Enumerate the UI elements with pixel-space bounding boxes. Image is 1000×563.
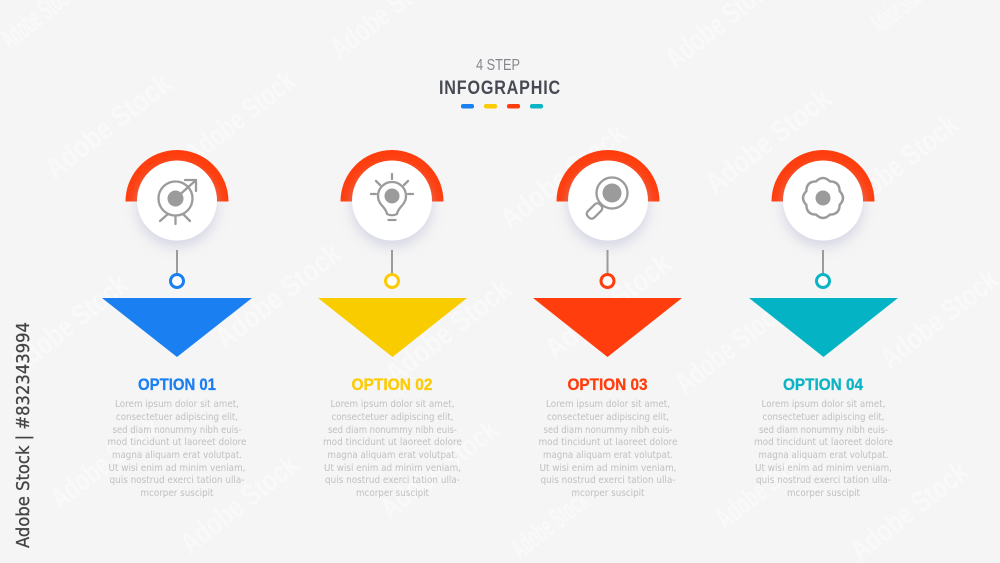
body text: quis nostrud exerci tation ulla- [110,475,245,486]
body text: Lorem ipsum dolor sit amet, [115,399,239,410]
red arc [340,150,444,202]
body text [538,399,678,499]
white circle [352,160,432,240]
body text: magna aliquam erat volutpat. [543,450,673,461]
ring marker [170,274,184,288]
white circle [783,160,863,240]
red triangle [533,298,682,357]
body text: quis nostrud exerci tation ulla- [325,475,460,486]
side credit: Adobe Stock id: Adobe Stock | #832343994 [14,322,34,548]
body text: sed diam nonummy nibh euis- [328,425,457,436]
body text: mcorper suscipit [787,488,860,499]
watermark pattern: Adobe Stock [709,442,816,536]
body text: consectetuer adipiscing elit, [762,412,884,423]
body text: sed diam nonummy nibh euis- [544,425,673,436]
body text: magna aliquam erat volutpat. [328,450,458,461]
body text: mcorper suscipit [572,488,645,499]
body text: mod tincidunt ut laoreet dolore [754,437,893,448]
body text: Lorem ipsum dolor sit amet, [762,399,886,410]
teal triangle [749,298,898,357]
white circle [137,160,217,240]
watermark pattern: Adobe Stock [539,247,678,366]
body text: quis nostrud exerci tation ulla- [756,475,891,486]
body text: Ut wisi enim ad minim veniam, [540,463,676,474]
body text: sed diam nonummy nibh euis- [112,425,242,436]
watermark pattern: Adobe Stock [494,117,633,236]
connector stem [391,250,393,274]
watermark pattern: Adobe Stock [39,67,178,186]
body text: Lorem ipsum dolor sit amet, [330,399,454,410]
heading: OPTION 01 [138,375,216,394]
body text: Ut wisi enim ad minim veniam, [324,463,461,474]
heading: OPTION 02 [352,375,432,394]
body text: mcorper suscipit [356,488,429,499]
panel: option 03 [533,150,682,499]
body text: mod tincidunt ut laoreet dolore [323,437,462,448]
body text: consectetuer adipiscing elit, [547,412,669,423]
watermark pattern: Adobe Stock [379,272,518,391]
heading: INFOGRAPHIC: INFOGRAPHIC [439,77,561,99]
red arc [126,150,228,202]
watermark pattern: Adobe Stock [4,268,135,381]
body text: magna aliquam erat volutpat. [758,450,888,461]
icon: magnifying glass [585,178,628,220]
body text: Ut wisi enim ad minim veniam, [108,463,246,474]
ring marker [601,274,614,288]
body text [754,399,893,499]
blue triangle [102,298,252,357]
body text: consectetuer adipiscing elit, [332,412,454,423]
connector stem [606,250,608,274]
watermark pattern: Adobe Stock [209,237,348,356]
body text: magna aliquam erat volutpat. [112,450,242,461]
title [439,57,561,99]
body text: consectetuer adipiscing elit, [116,412,238,423]
panel: option 01 [102,150,252,499]
subtitle: 4 STEP: 4 STEP [476,57,520,74]
heading: OPTION 03 [568,375,648,394]
icon: light bulb [371,174,413,220]
body text [108,399,246,499]
white circle [568,160,648,240]
red arc [556,150,660,202]
ring marker [386,274,398,288]
watermark pattern: Adobe Stock [834,108,965,221]
watermark pattern: Adobe Stock [174,448,305,561]
panel: option 02 [318,150,467,499]
ring marker [816,274,830,288]
watermark pattern: Adobe Stock [44,409,167,516]
body text: Lorem ipsum dolor sit amet, [546,399,670,410]
icon: target with arrow [158,180,196,224]
watermark pattern: Adobe Stock [504,484,595,563]
red arc [772,150,874,202]
body text: mod tincidunt ut laoreet dolore [538,437,678,448]
body text: mcorper suscipit [140,488,214,499]
yellow triangle [318,298,467,357]
watermark pattern: Adobe Stock [374,413,505,526]
connector stem [176,250,178,274]
connector stem [822,250,824,274]
body text: mod tincidunt ut laoreet dolore [108,437,246,448]
watermark pattern: Adobe Stock [669,294,792,401]
watermark pattern: Adobe Stock [179,64,302,171]
icon: gear badge [803,178,843,218]
title colour dashes [461,104,543,108]
body text: Ut wisi enim ad minim veniam, [755,463,892,474]
body text [323,399,462,499]
panel: option 04 [749,150,898,499]
watermark pattern: Adobe Stock [699,82,838,201]
body text: quis nostrud exerci tation ulla- [540,475,676,486]
heading: OPTION 04 [783,375,863,394]
body text: sed diam nonummy nibh euis- [759,425,888,436]
